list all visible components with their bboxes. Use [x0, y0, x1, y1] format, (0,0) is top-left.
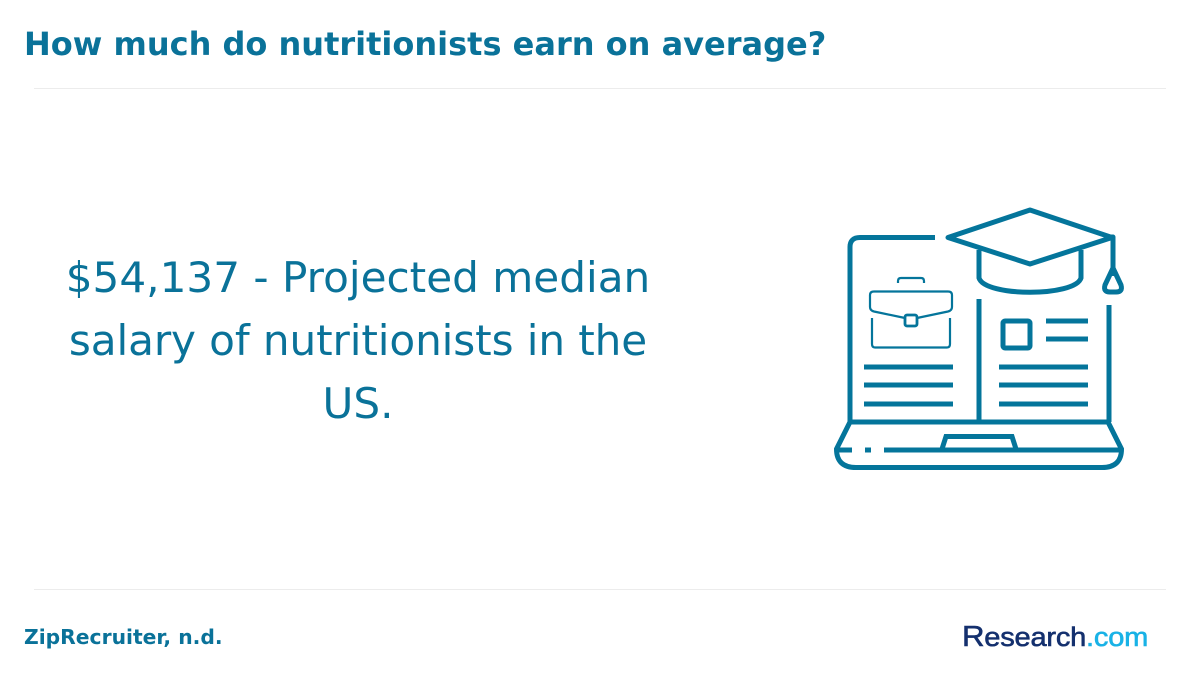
main statistic text: $54,137 - Projected median	[66, 253, 650, 302]
main statistic text: US.	[322, 379, 394, 428]
main statistic text	[66, 253, 650, 428]
left page text lines	[864, 367, 953, 404]
right page text lines	[999, 321, 1088, 404]
title: How much do nutritionists earn on average?	[24, 25, 826, 63]
graduation cap	[948, 210, 1121, 292]
main statistic text: salary of nutritionists in the	[69, 316, 647, 365]
laptop screen outline	[850, 238, 1109, 422]
source citation: ZipRecruiter, n.d.	[24, 625, 223, 649]
logo: Research.com: Research.com	[962, 621, 1148, 653]
profile photo box	[1003, 321, 1030, 348]
laptop base	[836, 422, 1122, 468]
icon: briefcase	[870, 278, 952, 348]
icon: laptop with graduation cap	[834, 208, 1124, 470]
